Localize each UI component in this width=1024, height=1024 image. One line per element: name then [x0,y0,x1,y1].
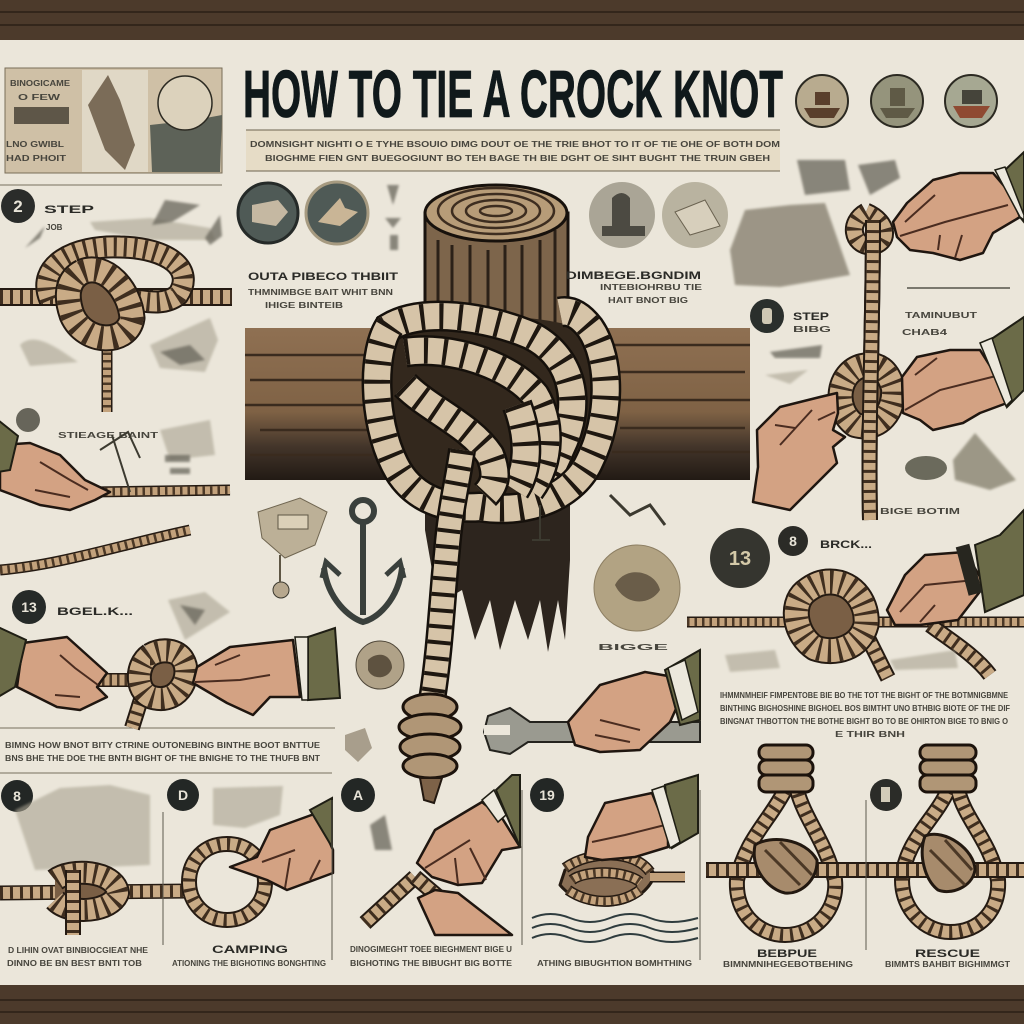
bottom panel 4: ATHING BIBUGHTION BOMHTHING [537,959,692,968]
sketches below step 2 knot [20,318,218,372]
bottom panel 2: D [178,787,188,803]
horizontal beam [245,328,750,480]
step heading right: TAMINUBUT [905,311,977,320]
step heading right: STEP [793,311,829,323]
bottom panel 1: DINNO BE BN BEST BNTI TOB [7,959,142,968]
step 2 heading [0,185,222,232]
step 13 heading: 13 [21,599,37,615]
step 2 heading: JOB [46,223,63,232]
bottom panel 3: DINOGIMEGHT TOEE BIEGHMENT BIGE U [350,945,512,954]
sketch: small tools [532,495,665,540]
step heading right: CHAB4 [902,328,948,337]
top right hand with rope [854,152,1024,520]
text block: left medallions [248,271,398,310]
sketch: right of knot: BIGE BOTIM [880,507,961,516]
rope end coil [399,694,461,803]
text block: left medallions: IHIGE BINTEIB [265,301,343,310]
step 2 heading: STEP [44,204,94,216]
icon: large coin: BIGGE [598,643,670,652]
text block: right: BINTHING BIGHOSHINE BIGHOEL BOS BIMTHT UNO BTHBIG BIOTE OF THE DIF [720,704,1010,713]
step 13 and 8 heading [710,526,872,588]
text block: right [720,691,1010,739]
text block: right medallions: DIMBEGE.BGNDIM [566,270,701,282]
text block: right medallions: HAIT BNOT BIG [608,296,688,305]
bottom panel 5: noose right: RESCUE [915,948,980,960]
icons: left medallions [238,182,401,250]
step 13 and 8 heading: BRCK... [820,539,872,551]
text block: right medallions [566,270,703,305]
icon: pick [100,432,140,492]
step 3 hand and rope [0,420,230,570]
horizontal rope with two knots [706,834,1024,893]
bottom panel 5: noose right [870,745,1010,969]
text block: lower left [0,741,332,773]
noose coil right [920,745,976,792]
bottom panel 1 [0,780,190,968]
bottom panel 1: 8 [13,788,21,804]
panel dividers [163,790,866,960]
subtitle text block: BIOGHME FIEN GNT BUEGOGIUNT BO TEH BAGE TH BIE DGHT OE SIHT BUGHT THE TRUIN GBEH [265,154,770,163]
step 2 heading: 2 [13,197,23,216]
icon: anchor [322,500,404,622]
bottom panel 2: CAMPING [212,944,288,956]
icon: large coin [594,545,680,652]
text block: right: E THIR BNH [835,730,905,739]
bottom panel 4: 19 [539,787,555,803]
bottom panel 5: noose left [723,745,853,969]
step 13 heading [12,590,230,640]
sketches near step 2 [25,200,222,248]
subtitle text block: DOMNSIGHT NIGHTI O E TYHE BSOUIO DIMG DOUT OE THE TRIE BHOT TO IT OF TIE OHE OF BOTH DOM [250,140,780,149]
bottom panel 5: noose left: BIMNMNIHEGEBOTBEHING [723,960,853,969]
step 8 rope and hand [687,510,1024,678]
step heading right: BIBG [793,325,831,334]
step heading right [750,299,977,384]
bottom panel 5: noose right: BIMMTS BAHBIT BIGHIMMGT [885,960,1010,969]
panel: top left illustrated box [5,68,222,173]
sketches under step 8 [725,650,958,672]
right step hands and knot [753,220,1024,520]
step 3 heading: STIEAGE BAINT [58,431,158,440]
text block: right: BINGNAT THBOTTON THE BOTHE BIGHT BO TO BE OHIRTON BIGE TO BNIG O [720,717,1008,726]
text block: lower left: BIMNG HOW BNOT BITY CTRINE OUTONEBING BINTHE BOOT BNTTUE [5,741,321,750]
step 13 heading: BGEL.K... [57,606,133,618]
bottom panel 3: BIGHOTING THE BIBUGHT BIG BOTTE [350,959,513,968]
bottom panel 3 [341,775,520,968]
hand with wrench [484,650,700,754]
sketch: map scene [730,160,1010,288]
icon: coin [345,641,404,762]
text block: right: IHMMNMHEIF FIMPENTOBE BIE BO THE TOT THE BIGHT OF THE BOTMNIGBMNE [720,691,1009,700]
text block: left medallions: OUTA PIBECO THBIIT [248,271,398,283]
rope tail [432,450,462,700]
text block: right medallions: INTEBIOHRBU TIE [600,283,703,292]
step 13 and 8 heading: 13 [729,548,751,570]
step 3 heading [16,408,215,474]
text block: lower left: BNS BHE THE DOE THE BNTH BIGHT OF THE BNIGHE TO THE THUFB BNT [5,754,320,763]
bottom panel 3: A [353,787,363,803]
icons: right medallions [589,182,728,248]
subtitle text block [246,130,780,171]
rope: step 2 knot [0,247,232,412]
main rope knot [377,312,606,700]
panel: top left illustrated box: HAD PHOIT [6,154,66,163]
step 13 and 8 heading: 8 [789,533,797,549]
bottom panel 4 [530,775,698,968]
bottom panel 2 [167,779,333,968]
step 13 hands and knot [0,627,340,728]
noose coil left [759,745,813,792]
icon: three round boat badges [796,75,997,127]
panel: top left illustrated box: LNO GWIBL [6,140,64,149]
bottom panel 5: noose left: BEBPUE [757,948,817,960]
panel: top left illustrated box: BINOGICAME [10,79,71,88]
text block: left medallions: THMNIMBGE BAIT WHIT BNN [248,288,393,297]
bottom panel 2: ATIONING THE BIGHOTING BONGHTING [172,959,326,968]
icon: clip [258,498,327,598]
bottom panel 1: D LIHIN OVAT BINBIOCGIEAT NHE [8,946,149,955]
central post [425,185,568,340]
panel: top left illustrated box: O FEW [18,93,61,102]
sketch: right of knot [880,433,1016,516]
lower post with drips [425,480,570,652]
